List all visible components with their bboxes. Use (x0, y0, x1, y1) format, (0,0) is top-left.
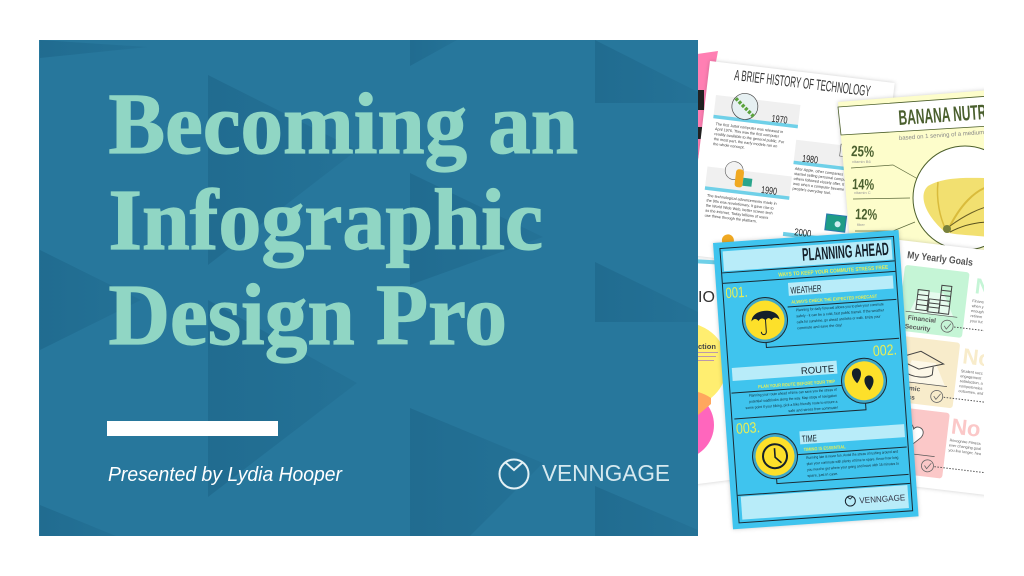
goal: health: No (950, 413, 982, 442)
stat 25%: 25% (851, 143, 874, 161)
venngage logo (500, 460, 670, 488)
goal: academic success: Student succ (961, 369, 983, 376)
entry 1980: people's everyday tool. (792, 187, 831, 195)
subtitle: WAYS TO KEEP YOUR COMMUTE STRESS FREE (778, 265, 889, 279)
section 002 route: Planning your route ahead of time can save you the stress of (749, 388, 838, 398)
stat 14%: 14% (852, 176, 874, 194)
section 003 time: TIMING IS ESSENTIAL (803, 444, 846, 452)
goal: academic success: Academic (889, 383, 921, 393)
entry 1990: the World Wide Web, better screen tech (706, 204, 773, 215)
icon: map pins (840, 357, 888, 405)
entry 1980: started selling personal computers (794, 172, 852, 183)
goal: health: you live longer, hea (948, 448, 982, 456)
card: planning ahead (713, 230, 919, 529)
white divider bar (107, 421, 278, 436)
goal: health: Recognise Fitness (949, 438, 981, 446)
footer band (741, 485, 909, 520)
title band (723, 239, 893, 271)
entry 1990 (704, 161, 792, 242)
goal: financial security (902, 265, 984, 338)
stat 12% (855, 206, 915, 231)
title: Design Pro (108, 266, 507, 363)
section 003 time: Running late is never fun. Avoid the stress of rushing around and (806, 450, 898, 460)
goal: financial security: when y (971, 304, 984, 309)
entry 1980: 1980 (801, 154, 819, 166)
card: my yearly goals (899, 238, 984, 497)
stat 25% (851, 146, 916, 178)
goal: financial security: your fut (970, 319, 984, 324)
goal: financial security: No (974, 273, 1006, 302)
entry 1990: as the internet. Today billions of users (705, 209, 769, 220)
entry 1980: was when a computer became (793, 182, 844, 192)
goal: academic success: No (961, 343, 993, 372)
entry 1990: 1990 (760, 185, 778, 198)
section 001 weather: 001. (725, 284, 748, 302)
section 002 route: 002. (872, 341, 898, 360)
heading: goals: My Yearly Goals (907, 250, 974, 269)
entry 1990: the 90s was revolutionary. It gave rise to (706, 199, 774, 211)
section 003 time: you need to get where your going and leave with 15 minutes to (807, 462, 899, 472)
goal: academic success: engagement (960, 374, 982, 381)
stat 14% (852, 176, 910, 199)
entry 1970: readily available to the general public. For (714, 132, 785, 144)
entry 1970: April 1976. This was the first computer (715, 127, 780, 139)
goal: financial security: Financial (907, 314, 936, 325)
goal: health (911, 408, 984, 478)
section 002 route (729, 341, 901, 419)
entry 1970: the whole concept. (713, 142, 745, 150)
title: Becoming an (108, 75, 578, 172)
section 002 route: safe and stress free commute! (788, 406, 838, 413)
partial section label: ction (698, 342, 716, 351)
goal: financial security: Financial (972, 299, 988, 305)
section 002 route: some point if your biking, pick a bike friendly route to ensure a (745, 400, 838, 410)
venngage logo: VENNGAGE (542, 460, 670, 486)
entry 1980 (792, 140, 845, 194)
goal: academic success (906, 336, 984, 408)
title (108, 75, 578, 363)
title: Infographic (108, 171, 543, 268)
presenter credit: Presented by Lydia Hooper (108, 464, 343, 486)
goal: academic success: competencies (959, 384, 983, 391)
goal: academic success: Success (888, 392, 916, 402)
section 003 time: 003. (735, 419, 761, 438)
stat 12%: fiber (857, 222, 865, 227)
entry 1980: others followed closely after. It (793, 177, 845, 187)
partial big label: IO (698, 289, 715, 306)
section 001 weather: WEATHER (790, 284, 822, 297)
icon: clock (751, 432, 799, 480)
section 001 weather: calls for sunshine, go ahead and bike or walk. Enjoy your (797, 314, 881, 324)
icon: umbrella (741, 296, 789, 344)
entry 1970 (713, 93, 800, 150)
section 001 weather: Planning for daily forecast allows you to plan your commute (796, 302, 884, 312)
goal: financial security: Security (904, 323, 931, 333)
goal: financial security: enough (971, 309, 984, 314)
section 002 route: PLAN YOUR ROUTE BEFORE YOUR TRIP (758, 379, 835, 389)
card: venn diagram partial (698, 259, 730, 486)
entry 1990: The technological advancements made in (707, 194, 777, 206)
section 001 weather: ALWAYS CHECK THE EXPECTED FORECAST (791, 294, 877, 305)
section 001 weather: safely - it can be a cold, fast public transit. If the weather (796, 308, 885, 318)
section 001 weather (725, 273, 899, 350)
card: banana nutrition (836, 88, 984, 250)
section 003 time: spare, just in case. (807, 472, 838, 478)
subheading: based on 1 serving of a medium sized banana (899, 127, 1022, 142)
section 003 time (736, 422, 910, 496)
card: history of technology (698, 60, 896, 260)
stat 12%: 12% (855, 206, 877, 224)
footer band: VENNGAGE (859, 492, 906, 505)
heading: technology: A BRIEF HISTORY OF TECHNOLOGY (733, 67, 871, 100)
section 001 weather: commute and save the day! (797, 323, 842, 330)
section 002 route: potential roadblocks along the way. Map stops of navigation (749, 394, 837, 404)
panel: title slide (39, 40, 698, 536)
goal: financial security: retirem (970, 314, 982, 319)
title band (838, 96, 990, 135)
section 003 time: TIME (802, 433, 817, 445)
entry 1970: the most part, the early models ran on (714, 137, 778, 149)
illustration: bananas (912, 146, 984, 250)
entry 1970: 1970 (771, 114, 788, 127)
entry 1990: use these through the platform. (704, 213, 757, 224)
section 003 time: plan your commute with plenty of time to spare. Know how long (807, 456, 899, 466)
collage of infographic samples (698, 51, 984, 531)
stat 25%: vitamin B6 (852, 159, 871, 164)
goal: health: ever changing goal (949, 443, 981, 451)
section 002 route: ROUTE (801, 364, 834, 377)
pink card (698, 51, 718, 160)
stat 14%: vitamin C (854, 190, 871, 195)
entry 1980: After Apple, other companies (795, 167, 844, 177)
entry 1970: The first Juttel computer was released in (715, 122, 783, 134)
entry 2000: 2000 (794, 227, 812, 240)
entry 2000 (782, 213, 848, 238)
goal: academic success: satisfaction, a (959, 379, 984, 386)
goal: academic success: outcomes, and (958, 389, 984, 396)
title band: PLANNING AHEAD (801, 239, 890, 265)
